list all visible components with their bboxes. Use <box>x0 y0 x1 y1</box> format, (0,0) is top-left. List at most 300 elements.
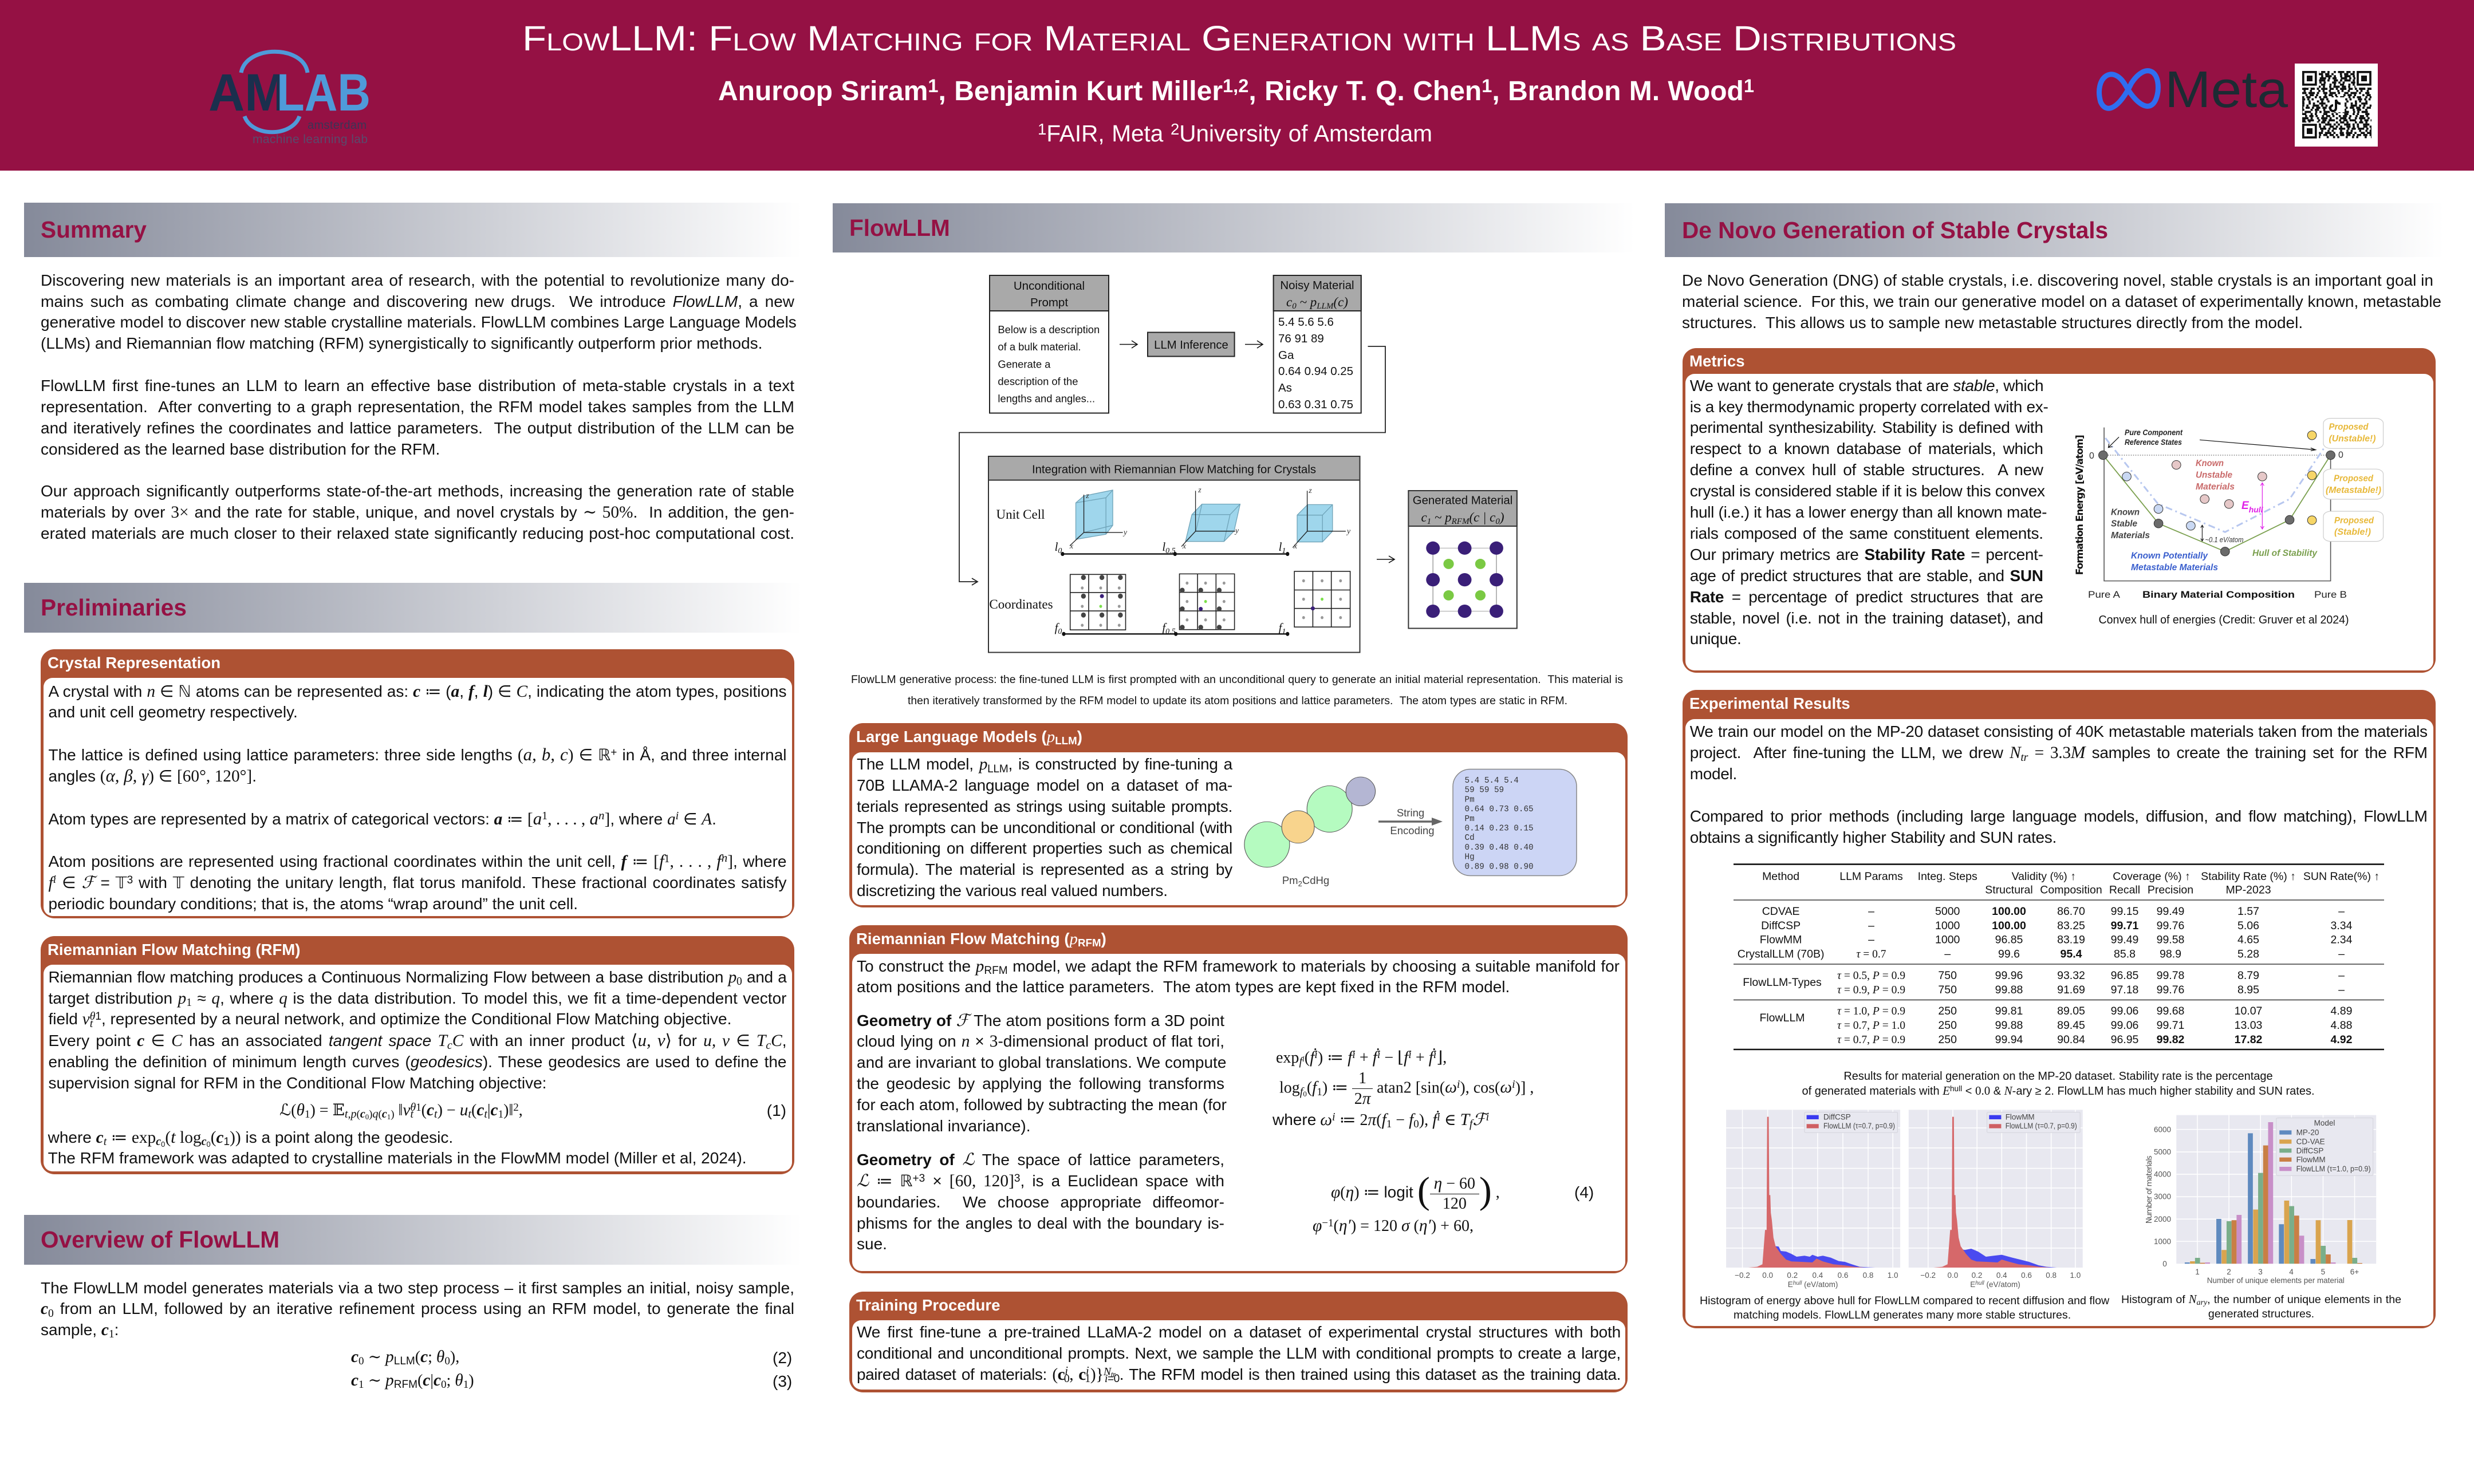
encoded string box: Pm <box>1465 815 1475 824</box>
figure: convex hull of energies: Known Potentially <box>2131 551 2208 561</box>
FlowLLM rows: τ = 0.7, P = 0.9 <box>1837 1034 1905 1046</box>
panel text: Riemannian flow matching produces a Continuous Normalizing Flow between a base distribution p0 and a <box>48 968 786 988</box>
text: geometry of L: Geometry of ℒ The space of lattice parameters, <box>857 1151 1224 1169</box>
text after equation 1: where ct ≔ expc0(t logc0(c1)) is a point along the geodesic. <box>48 1127 453 1148</box>
section heading: FlowLLM <box>833 203 1634 252</box>
baseline rows: 1000 <box>1935 919 1960 932</box>
FlowLLM rows: 99.82 <box>2157 1033 2185 1046</box>
chart: energy above hull histogram vs DiffCSP: 0.4 <box>1813 1271 1823 1280</box>
interpolation labels: l <box>1055 540 1058 554</box>
FlowLLM rows: 90.84 <box>2057 1033 2085 1046</box>
panel text: stable, novel (i.e. not in the training dataset), and <box>1690 609 2043 627</box>
chart: energy above hull histogram vs DiffCSP: hull <box>1793 1280 1802 1286</box>
encoded string box: 59 59 59 <box>1465 786 1504 795</box>
box: LLM inference: LLM Inference <box>1154 339 1228 352</box>
baseline rows: – <box>1868 919 1874 932</box>
text: de novo intro <box>1682 270 2433 333</box>
baseline rows: 99.49 <box>2111 933 2138 946</box>
figure: convex hull of energies: 0 <box>2338 450 2343 460</box>
string encoding arrow: Encoding <box>1390 824 1435 836</box>
baseline rows: – <box>1868 905 1874 918</box>
figure caption: generative process: then iteratively transformed by the RFM model to update its atom positions and lattice parameters. The atom types are static in RFM. <box>908 694 1567 707</box>
FlowLLM rows: 99.06 <box>2111 1019 2138 1032</box>
text: summary paragraphs: Discovering new materials is an important area of research, with the potential to revolutionize many do- <box>41 271 794 289</box>
chart: unique elements bar chart: CD-VAE <box>2296 1137 2325 1146</box>
text: summary paragraphs: materials by over 3× and the rate for stable, unique, and novel crystals by ∼ 50%. In addition, the gen- <box>41 503 794 522</box>
figure: convex hull of energies <box>2074 419 2384 626</box>
FlowLLM-Types rows: 99.88 <box>1995 984 2023 996</box>
chart: unique elements bar chart: 2000 <box>2154 1215 2171 1223</box>
panel: large language models <box>849 723 1628 907</box>
panel heading: Experimental Results <box>1689 694 1850 712</box>
interpolation labels: 1 <box>1282 547 1286 555</box>
equation 3: c1 ∼ pRFM(c|c0; θ1) <box>351 1371 474 1391</box>
chart: energy above hull histogram vs FlowMM: E <box>1970 1280 1975 1289</box>
chart: unique elements bar chart: 1 <box>2195 1268 2200 1276</box>
FlowLLM-Types rows: 93.32 <box>2057 969 2085 982</box>
encoded string box: Cd <box>1465 834 1475 843</box>
table header <box>1762 870 2380 897</box>
text: overview <box>41 1279 794 1340</box>
log equation: logf0(f1) ≔ atan2 [sin(ωi), cos(ωi)] , <box>1279 1078 1534 1098</box>
panel: metrics <box>1683 348 2436 673</box>
table header: Precision <box>2148 884 2193 897</box>
text: summary paragraphs: Our approach significantly outperforms state-of-the-art methods, increasing the generation rate of stable <box>41 482 794 500</box>
panel text: paired dataset of materials: (ci0, ci1)}Ntri=0. The RFM model is then trained using this dataset as the training data. <box>857 1364 1621 1385</box>
section heading: Summary: Summary <box>41 216 147 243</box>
hull drawing <box>2099 419 2384 581</box>
FlowLLM-Types rows: 99.96 <box>1995 969 2023 982</box>
section heading: FlowLLM: FlowLLM <box>849 214 950 240</box>
baseline rows: 1000 <box>1935 933 1960 946</box>
figure: convex hull of energies: Binary Material Composition <box>2142 589 2295 600</box>
box: generated material: 1 <box>1427 517 1431 526</box>
box: generated material: RFM <box>1451 517 1470 526</box>
log equation: 1 <box>1358 1069 1366 1087</box>
panel body background <box>1685 374 2433 670</box>
authors: Anuroop Sriram1, Benjamin Kurt Miller1,2, Ricky T. Q. Chen1, Brandon M. Wood1 <box>718 75 1754 106</box>
FlowLLM-Types rows: 750 <box>1938 984 1957 996</box>
text: overview: The FlowLLM model generates materials via a two step process – it first samples an initial, noisy sample, <box>41 1279 794 1297</box>
box: noisy material: 0.63 0.31 0.75 <box>1278 398 1353 411</box>
baseline rows: 85.8 <box>2114 948 2136 961</box>
FlowLLM rows: 89.05 <box>2057 1005 2085 1017</box>
log equation: 2π <box>1354 1090 1370 1108</box>
hull caption: Convex hull of energies (Credit: Gruver et al 2024) <box>2098 614 2349 626</box>
logo: Meta <box>2099 61 2288 119</box>
section heading: De Novo Generation: De Novo Generation of Stable Crystals <box>1682 216 2108 243</box>
axis labels: y <box>1234 527 1239 535</box>
chart: unique elements bar chart: Number of unique elements per material <box>2207 1276 2345 1285</box>
row label: coordinates: Coordinates <box>989 597 1053 611</box>
chart: energy above hull histogram vs DiffCSP <box>1726 1110 1900 1289</box>
panel body background <box>852 752 1625 905</box>
logo: Meta: Meta <box>2165 61 2288 119</box>
panel text <box>48 682 787 913</box>
figure: convex hull of energies: Pure B <box>2314 589 2347 600</box>
axis labels: x <box>1182 542 1187 551</box>
chart: energy above hull histogram vs DiffCSP: 0.8 <box>1863 1271 1873 1280</box>
text: de novo intro: De Novo Generation (DNG) of stable crystals, i.e. discovering novel, stable crystals is an important goal in <box>1682 271 2433 289</box>
panel: crystal representation <box>41 649 794 918</box>
element count caption: generated structures. <box>2208 1308 2314 1320</box>
logo: AMLab: machine learning lab <box>253 133 368 146</box>
FlowLLM-Types rows: 91.69 <box>2057 984 2085 996</box>
encoded string box: 0.89 0.98 0.90 <box>1465 862 1534 871</box>
panel text: The LLM model, pLLM, is constructed by fine-tuning a <box>857 755 1232 775</box>
interpolation labels: f <box>1279 621 1282 634</box>
affiliations: 1FAIR, Meta 2University of Amsterdam <box>1038 120 1432 147</box>
panel heading: Training Procedure <box>856 1296 1000 1313</box>
figure caption: generative process <box>851 673 1623 707</box>
box: noisy material: c <box>1286 295 1292 309</box>
figure: convex hull of energies: 0 <box>2089 451 2094 461</box>
figure: convex hull of energies: Metastable Materials <box>2131 563 2218 573</box>
chart: energy above hull histogram vs DiffCSP: 0.0 <box>1762 1271 1773 1280</box>
panel body background <box>44 678 791 916</box>
section heading: Summary <box>24 203 802 257</box>
equation number 4: (4) <box>1574 1183 1594 1201</box>
panel text: angles (α, β, γ) ∈ [60°, 120°]. <box>48 765 257 786</box>
baseline rows: 99.6 <box>1998 948 2020 961</box>
box: unconditional prompt: Below is a description <box>998 323 1100 336</box>
FlowLLM rows: 13.03 <box>2235 1019 2262 1032</box>
box: generated material: ) <box>1499 510 1504 524</box>
FlowLLM rows: 99.81 <box>1995 1005 2023 1017</box>
text after equation 1 <box>48 1127 747 1167</box>
FlowLLM-Types rows: τ = 0.5, P = 0.9 <box>1837 970 1905 982</box>
text: summary paragraphs: representation. After converting to a graph representation, the RFM model takes samples from the LLM <box>41 398 794 416</box>
box: noisy material: 5.4 5.6 5.6 <box>1278 315 1334 329</box>
panel text: Compared to prior methods (including large language models, diffusion, and flow matching), FlowLLM <box>1690 807 2428 825</box>
figure caption: generative process: FlowLLM generative process: the fine-tuned LLM is first prompted with an unconditional query to generate an initial material representation. This material is <box>851 673 1623 686</box>
FlowLLM rows <box>1759 1005 2353 1046</box>
baseline rows: 99.15 <box>2111 905 2139 918</box>
box: unconditional prompt: Unconditional <box>1014 279 1085 293</box>
baseline rows: 100.00 <box>1992 919 2026 932</box>
axis labels: z <box>1085 492 1089 500</box>
FlowLLM rows: 99.06 <box>2111 1005 2138 1017</box>
FlowLLM-Types rows: 8.79 <box>2237 969 2259 982</box>
panel text: and unit cell geometry respectively. <box>48 703 298 721</box>
text: geometry of F: cloud lying on n × 3-dimensional product of flat tori, <box>857 1032 1224 1051</box>
text: summary paragraphs: generative model to discover new stable crystalline materials. FlowLLM combines Large Language Models <box>41 313 797 331</box>
FlowLLM-Types rows: 97.18 <box>2111 984 2138 996</box>
panel text: We first fine-tune a pre-trained LLaMA-2 model on a dataset of experimental crystal structures with both <box>857 1323 1621 1341</box>
encoded string box: 0.39 0.48 0.40 <box>1465 843 1534 852</box>
section heading: De Novo Generation <box>1665 203 2444 257</box>
header banner <box>0 0 2474 171</box>
box: generated material: ~ p <box>1431 510 1452 524</box>
panel text: conditioning on different properties such as chemical <box>857 839 1232 857</box>
panel text: discretizing the various real valued numbers. <box>857 882 1168 899</box>
element count caption: Histogram of Nary, the number of unique elements in the <box>2121 1293 2401 1307</box>
equation numbers 2 and 3 <box>773 1349 792 1390</box>
equation 2: c0 ∼ pLLM(c; θ0), <box>351 1348 459 1367</box>
chart: energy above hull histogram vs FlowMM: 0.8 <box>2046 1271 2057 1280</box>
FlowLLM rows: 99.71 <box>2157 1019 2184 1032</box>
table header: SUN Rate(%) ↑ <box>2303 870 2380 883</box>
box: integration with RFM: Integration with Riemannian Flow Matching for Crystals <box>1032 464 1316 476</box>
chart: energy above hull histogram vs DiffCSP: (eV/atom) <box>1802 1280 1838 1289</box>
panel heading: Large Language Models (pLLM) <box>856 728 1082 747</box>
box: noisy material: (c) <box>1333 295 1348 309</box>
baseline rows: 1.57 <box>2237 905 2259 918</box>
equation 1: ℒ(θ1) = 𝔼t,p(c0)q(c1) ‖vtθ1(ct) − ut(ct|c1)‖2, <box>279 1101 523 1121</box>
FlowLLM rows: 99.94 <box>1995 1033 2023 1046</box>
FlowLLM-Types rows: 96.85 <box>2111 969 2139 982</box>
exp equation: expfi(ḟi) ≔ fi + ḟi − ⌊fi + ḟi⌋, <box>1276 1048 1447 1068</box>
panel text: model. <box>1690 765 1737 783</box>
chart: unique elements bar chart: 3000 <box>2154 1192 2171 1201</box>
figure: convex hull of energies: Unstable <box>2196 471 2232 480</box>
FlowLLM-Types rows: FlowLLM-Types <box>1743 976 1822 989</box>
FlowLLM-Types rows: 750 <box>1938 969 1957 982</box>
baseline rows: CDVAE <box>1762 905 1799 918</box>
box: noisy material: LLM <box>1316 302 1334 311</box>
baseline rows: 99.58 <box>2157 933 2184 946</box>
logo: AMLab: LAB <box>277 64 371 122</box>
chart: energy above hull histogram vs FlowMM: FlowLLM (τ=0.7, p=0.9) <box>2006 1122 2077 1130</box>
inverse phi equation: φ−1(η′) = 120 σ (η′) + 60, <box>1313 1217 1474 1235</box>
figure: convex hull of energies: Proposed <box>2334 474 2374 483</box>
panel text: A crystal with n ∈ ℕ atoms can be represented as: c ≔ (a, f, l) ∈ C, indicating the atom types, positions <box>48 682 787 701</box>
chart: unique elements bar chart: 4 <box>2289 1268 2294 1276</box>
panel heading: Crystal Representation <box>48 654 220 672</box>
string encoding arrow <box>1378 807 1443 836</box>
table header: MP-2023 <box>2225 884 2271 897</box>
panel heading: Riemannian Flow Matching (pRFM) <box>856 930 1106 949</box>
row label: unit cell: Unit Cell <box>996 507 1045 522</box>
panel text: We want to generate crystals that are stable, which <box>1690 377 2043 394</box>
table header: Validity (%) ↑ <box>2012 870 2076 883</box>
encoded string box: 0.64 0.73 0.65 <box>1465 805 1534 814</box>
panel body background <box>1685 719 2433 1326</box>
box: unconditional prompt: Prompt <box>1030 296 1068 309</box>
box: generated material: 0 <box>1495 517 1500 526</box>
phi equation: 120 <box>1443 1195 1467 1213</box>
encoded string box: 5.4 5.4 5.4 <box>1465 776 1519 786</box>
FlowLLM rows: 99.88 <box>1995 1019 2023 1032</box>
results table <box>1734 865 2384 1049</box>
chart: unique elements bar chart: 6000 <box>2154 1126 2171 1134</box>
FlowLLM rows: 96.95 <box>2111 1033 2139 1046</box>
figure: FlowLLM process diagram <box>959 275 1517 653</box>
panel text: project. After fine-tuning the LLM, we drew Ntr = 3.3M samples to create the training set for the RFM <box>1690 742 2428 764</box>
chart: energy above hull histogram vs DiffCSP: 0.6 <box>1838 1271 1848 1280</box>
text: geometry of L: boundaries. We choose appropriate diffeomor- <box>857 1193 1224 1211</box>
panel text: target distribution p1 ≈ q, where q is the data distribution. To model this, we fit a time-dependent vector <box>48 989 786 1009</box>
text: geometry of F: translational invariance). <box>857 1117 1031 1135</box>
histogram caption: matching models. FlowLLM generates many more stable structures. <box>1734 1309 2071 1321</box>
panel text: define a convex hull of stable structures. A new <box>1690 461 2043 479</box>
chart: energy above hull histogram vs FlowMM: 0.6 <box>2021 1271 2032 1280</box>
section heading: Overview of FlowLLM <box>24 1215 802 1265</box>
panel text: terials represented as strings using suitable prompts. <box>857 798 1232 815</box>
panel text: perimental synthesizability. Stability is defined with <box>1690 419 2043 436</box>
baseline rows: τ = 0.7 <box>1856 949 1886 961</box>
panel text: 70B LLAMA-2 language model on a dataset of ma- <box>857 776 1232 794</box>
text after equation 1: The RFM framework was adapted to crystalline materials in the FlowMM model (Miller et al, 2024). <box>48 1149 747 1167</box>
table caption <box>1798 1069 2319 1099</box>
chart: energy above hull histogram vs FlowMM: FlowMM <box>2006 1113 2035 1121</box>
panel text: is a key thermodynamic property correlated with ex- <box>1690 397 2048 416</box>
phi equation: φ(η) ≔ logit ( ) , <box>1331 1170 1500 1211</box>
box: generated material: Generated Material <box>1413 495 1512 507</box>
encoded string box <box>1453 769 1577 876</box>
text: geometry of F: the geodesic by applying the following transforms <box>857 1075 1224 1092</box>
table header: Composition <box>2040 884 2102 897</box>
FlowLLM-Types rows: – <box>2338 969 2345 982</box>
chart: unique elements bar chart: 5 <box>2321 1268 2325 1276</box>
interpolation labels: l <box>1162 540 1165 554</box>
equation numbers 2 and 3: (3) <box>773 1372 792 1390</box>
equations: logit transform <box>1313 1166 1593 1237</box>
baseline rows: 3.34 <box>2331 919 2353 932</box>
encoded string box: Pm <box>1465 795 1475 804</box>
baseline rows <box>1738 905 2353 961</box>
axis labels: z <box>1308 487 1312 495</box>
panel text: age of predict structures that are stable, and SUN <box>1690 567 2043 585</box>
box: unconditional prompt: Generate a <box>998 358 1051 370</box>
figure: convex hull of energies: hull <box>2249 505 2264 514</box>
encoded string box: 0.14 0.23 0.15 <box>1465 824 1534 834</box>
text: summary paragraphs: erated materials are much closer to their relaxed state significantly reducing post-hoc computational cost. <box>41 524 794 542</box>
figure: convex hull of energies: E <box>2241 500 2249 512</box>
formula label: 2 <box>1298 879 1302 888</box>
FlowLLM rows: τ = 1.0, P = 0.9 <box>1837 1005 1905 1017</box>
axis labels: y <box>1346 527 1351 536</box>
FlowLLM-Types rows: – <box>2338 984 2345 996</box>
baseline rows: – <box>1944 948 1951 961</box>
formula label: CdHg <box>1302 874 1329 886</box>
figure: convex hull of energies: Pure Component <box>2125 428 2183 437</box>
axis labels: y <box>1122 528 1128 537</box>
box: generated material: (c | c <box>1469 510 1495 524</box>
baseline rows: 99.76 <box>2157 919 2184 932</box>
text: geometry of F <box>857 1012 1227 1135</box>
FlowLLM rows: 4.89 <box>2331 1005 2352 1017</box>
text: summary paragraphs: and iteratively refines the coordinates and lattice parameters. The output distribution of the LLM can be <box>41 419 794 437</box>
text: overview: c0 from an LLM, followed by an iterative refinement process using an RFM model, to generate the final <box>41 1300 794 1320</box>
interpolation labels: 0 <box>1058 627 1062 636</box>
table caption: Results for material generation on the MP-20 dataset. Stability rate is the percentage <box>1843 1070 2273 1083</box>
interpolation labels: 0 <box>1058 547 1062 555</box>
baseline rows: – <box>2338 948 2345 961</box>
FlowLLM-Types rows: 99.76 <box>2157 984 2184 996</box>
figure: convex hull of energies: (Unstable!) <box>2329 434 2375 444</box>
panel text: hull (i.e.) it has a lower energy than all known mate- <box>1690 503 2047 521</box>
panel text: conditional and unconditional prompts. Next, we sample the LLM with conditional prompts to create a large, <box>857 1344 1621 1362</box>
figure: convex hull of energies: Known <box>2196 459 2224 468</box>
text: de novo intro: structures. This allows us to sample new metastable structures directly from the model. <box>1682 314 2303 331</box>
figure: string encoding of crystal <box>1244 769 1577 888</box>
baseline rows: 5000 <box>1935 905 1960 918</box>
baseline rows: DiffCSP <box>1761 919 1801 932</box>
chart: unique elements bar chart: 4000 <box>2154 1170 2171 1178</box>
string encoding arrow: String <box>1397 807 1424 819</box>
QR code <box>2295 64 2378 147</box>
box: generated material <box>1408 491 1517 629</box>
interpolation labels: l <box>1279 540 1282 554</box>
logo: AMLab: AM <box>208 64 286 122</box>
chart: unique elements bar chart <box>2145 1115 2376 1285</box>
section heading: Preliminaries: Preliminaries <box>41 594 187 621</box>
omega definition: where ωi ≔ 2π(f1 − f0), ḟi ∈ Tfℱi <box>1273 1111 1489 1130</box>
interpolation labels: f <box>1055 621 1058 634</box>
baseline rows: FlowMM <box>1760 933 1802 946</box>
panel text: enabling the definition of minimum length curves (geodesics). These geodesics are used to define the <box>48 1053 787 1071</box>
box: unconditional prompt: lengths and angles... <box>998 393 1095 404</box>
panel body background <box>44 965 791 1171</box>
panel text: fi ∈ ℱ = 𝕋3 with 𝕋 denoting the unitary length, flat torus manifold. These fractional coordinates satisfy <box>48 873 787 892</box>
baseline rows: 100.00 <box>1992 905 2026 918</box>
text: geometry of L <box>857 1151 1224 1253</box>
crystal structure <box>1426 542 1503 618</box>
baseline rows: 5.06 <box>2237 919 2259 932</box>
panel text: obtains a significantly higher Stability and SUN rates. <box>1690 828 2057 846</box>
panel text: crystal is considered stable if it is below this convex <box>1690 482 2045 500</box>
connector arrow: noisy material to integration <box>959 346 1385 585</box>
chart: unique elements bar chart: Model <box>2314 1119 2335 1127</box>
FlowLLM rows: 99.68 <box>2157 1005 2184 1017</box>
FlowLLM rows: FlowLLM <box>1759 1012 1805 1024</box>
panel: Riemannian flow matching summary <box>41 936 794 1174</box>
chart: unique elements bar chart: FlowMM <box>2296 1155 2326 1164</box>
axis labels: z <box>1197 486 1201 495</box>
chart: unique elements bar chart: 2 <box>2227 1268 2231 1276</box>
interpolation labels: 1 <box>1282 627 1286 636</box>
chart: energy above hull histogram vs FlowMM: −0.2 <box>1920 1271 1936 1280</box>
formula label: Pm <box>1282 874 1298 886</box>
panel text <box>1690 376 2043 650</box>
panel: Riemannian flow matching detail <box>849 925 1628 1273</box>
box: noisy material: ~ p <box>1297 295 1317 309</box>
baseline rows: 2.34 <box>2331 933 2353 946</box>
figure: convex hull of energies: Reference States <box>2125 437 2182 447</box>
box: noisy material: Noisy Material <box>1280 279 1354 292</box>
figure: convex hull of energies: Pure A <box>2088 589 2121 600</box>
chart: unique elements bar chart: DiffCSP <box>2296 1146 2323 1155</box>
panel text: field vtθ1, represented by a neural network, and optimize the Conditional Flow Matching objective. <box>48 1010 731 1030</box>
chart: energy above hull histogram vs FlowMM <box>1909 1110 2083 1289</box>
box: unconditional prompt: description of the <box>998 376 1078 387</box>
table header: LLM Params <box>1839 870 1903 883</box>
text: summary paragraphs: FlowLLM first fine-tunes an LLM to learn an effective base distribution of meta-stable crystals in a text <box>41 377 794 394</box>
panel text: Every point c ∈ C has an associated tangent space TcC with an inner product ⟨u, v⟩ for u, v ∈ TcC, <box>48 1030 787 1052</box>
equations: exp and log maps <box>1273 1045 1513 1131</box>
interpolation labels: f <box>1162 621 1165 634</box>
figure: convex hull of energies: Stable <box>2111 519 2137 529</box>
text: summary paragraphs: mains such as combating climate change and discovering new drugs. We introduce FlowLLM, a new <box>41 292 794 310</box>
box: noisy material: 0.64 0.94 0.25 <box>1278 365 1353 378</box>
composition circles <box>1244 777 1376 867</box>
figure: convex hull of energies: Materials <box>2111 531 2150 540</box>
chart: unique elements bar chart: MP-20 <box>2296 1128 2319 1137</box>
baseline rows: – <box>2338 905 2345 918</box>
box: generated material: c <box>1421 510 1427 524</box>
unit cells and coordinate grids <box>1061 490 1350 636</box>
histogram caption: Histogram of energy above hull for FlowLLM compared to recent diffusion and flow <box>1700 1294 2109 1307</box>
panel text <box>857 1322 1621 1385</box>
FlowLLM rows: 4.88 <box>2331 1019 2352 1032</box>
chart: energy above hull histogram vs FlowMM: 1.0 <box>2070 1271 2081 1280</box>
box: noisy material: 0 <box>1292 302 1297 311</box>
text: summary paragraphs: (LLMs) and Riemannian flow matching (RFM) synergistically to significantly outperform prior methods. <box>41 334 762 352</box>
panel text: The prompts can be unconditional or conditional (with <box>857 819 1232 836</box>
figure: convex hull of energies: Proposed <box>2334 516 2374 526</box>
poster title: FlowLLM: Flow Matching for Material Generation with LLMs as Base Distributions <box>522 19 1956 58</box>
